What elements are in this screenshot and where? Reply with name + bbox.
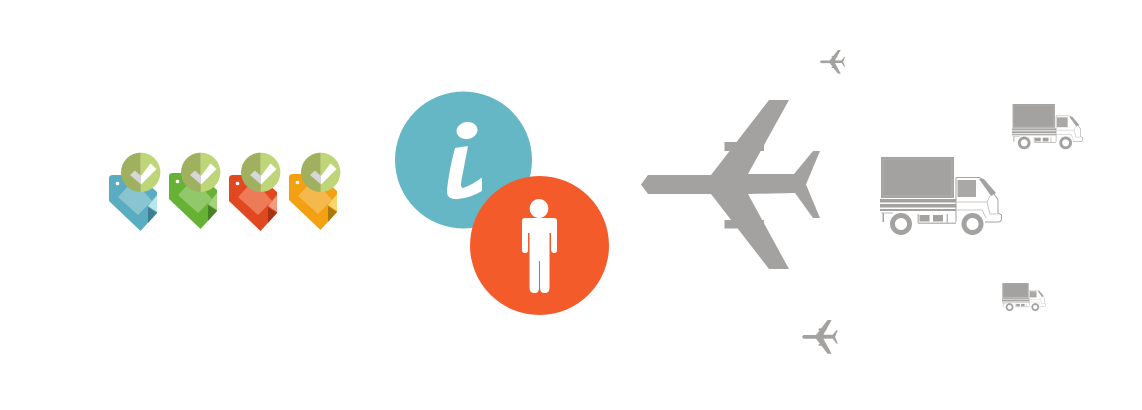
icon: orange tag — [289, 153, 340, 230]
icon: small airplane top — [820, 50, 845, 74]
icon: small truck — [1002, 283, 1046, 310]
icon: medium truck — [1012, 104, 1082, 148]
tag group — [109, 153, 340, 231]
icon: large airplane — [641, 100, 820, 269]
icon: red tag — [229, 153, 280, 231]
icon: person circle — [470, 176, 609, 315]
icon: blue tag — [109, 153, 160, 231]
icon: info circle — [395, 92, 532, 228]
icon: small airplane bottom — [802, 320, 838, 354]
icon: green tag — [169, 153, 220, 229]
icon: large truck — [880, 157, 1002, 232]
